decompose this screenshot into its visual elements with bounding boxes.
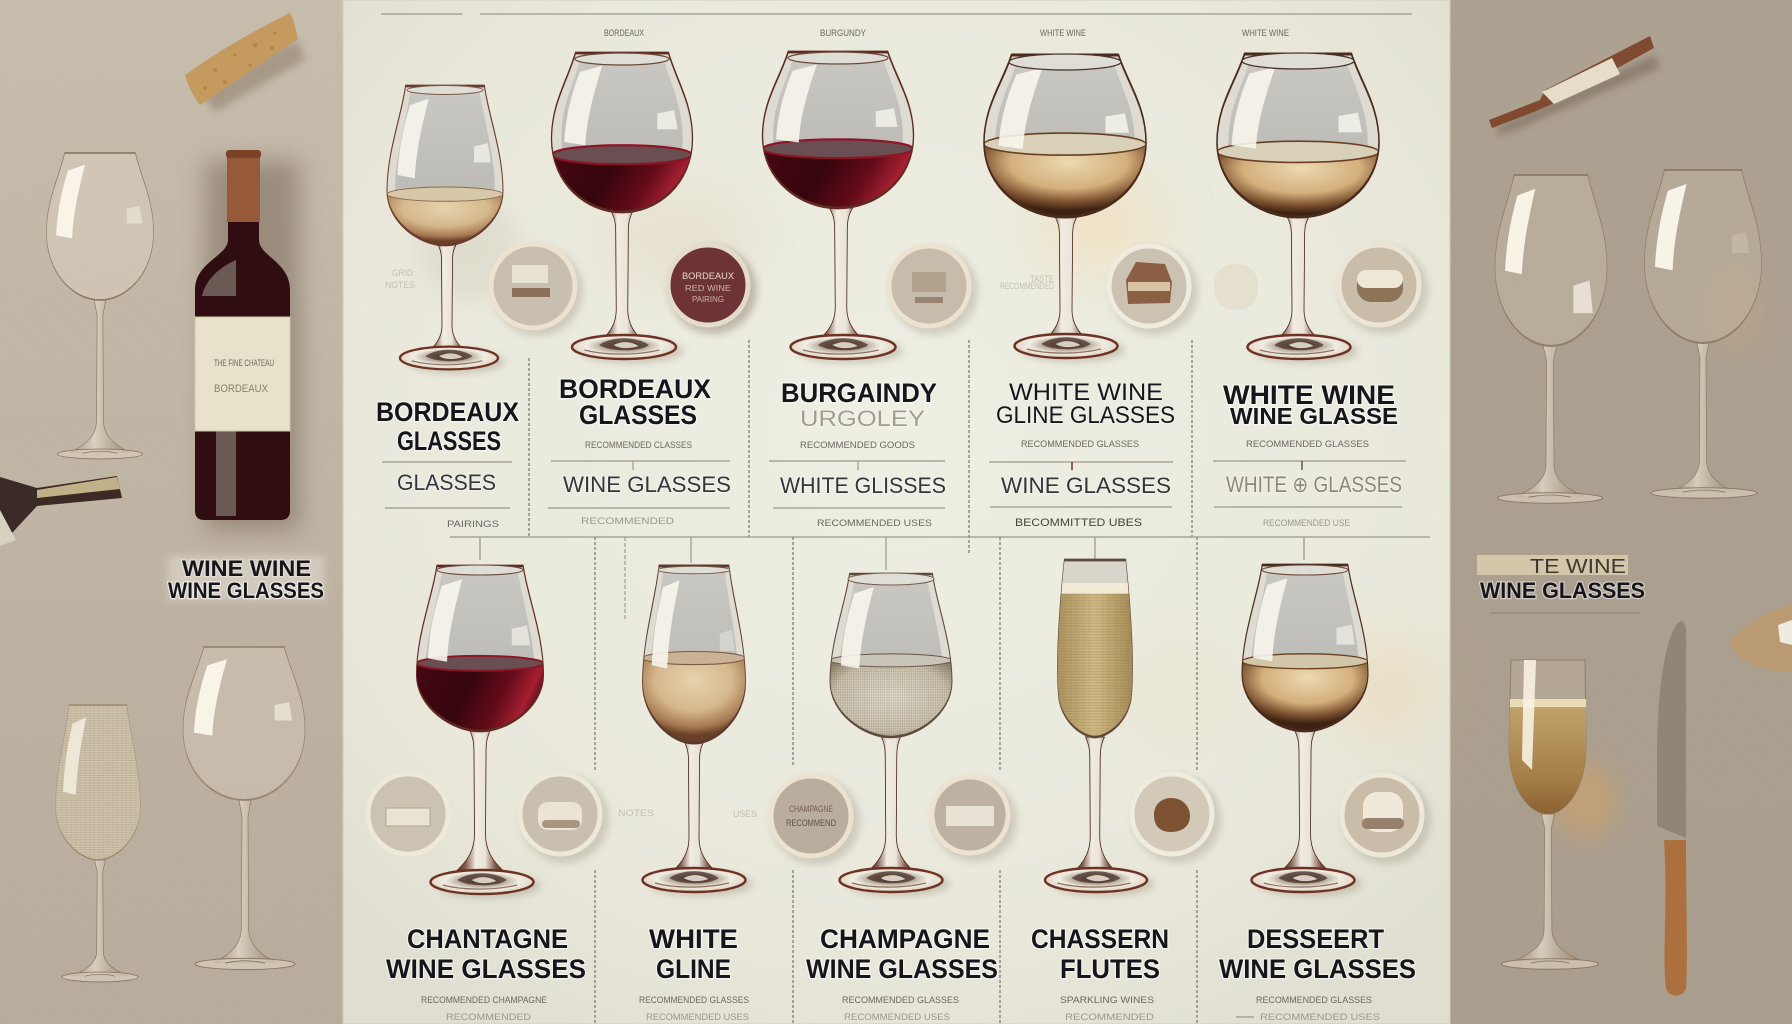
label: chantagne: RECOMMENDED [446,1012,531,1023]
left backdrop [0,0,345,1024]
label: white gline: WHITE [649,924,738,954]
badge: faint side tag: USES [733,809,757,820]
label: white gline [639,924,749,1023]
label: bordeaux 2: BORDEAUX [559,374,711,404]
top captions: WHITE WINE [1040,28,1086,39]
glass 4: white wine balloon [976,54,1154,362]
label: champagne: CHAMPAGNE [820,924,990,954]
glass 8: sparkling tulip [824,573,958,896]
badges: top row: PAIRING [692,295,724,304]
label: dessert [1219,924,1416,1023]
badges: top row: RED WINE [685,284,731,293]
label: dessert: DESSEERT [1247,924,1384,954]
label: white wine 1 [989,379,1175,529]
right backdrop [1448,0,1792,1024]
label: white wine 1: BECOMMITTED UBES [1015,517,1142,529]
label: burgundy: WHITE GLISSES [780,473,946,498]
badges: top row [491,244,1428,336]
badge: faint side tag [385,264,1258,820]
label: chantagne [386,924,586,1023]
label: bordeaux 2: WINE GLASSES [563,472,731,497]
icon: knife [1657,621,1687,996]
label: bordeaux 1 [376,397,519,530]
top captions: WHITE WINE [1242,28,1289,39]
label: burgundy [769,378,946,529]
panel: paper chart [343,0,1450,1024]
glass 1: tulip with white wine [381,86,520,373]
label: chantagne: CHANTAGNE [407,924,568,954]
label: burgundy: BURGAINDY [781,378,937,408]
label: white wine 2: WHITE ⊕ GLASSES [1226,472,1402,497]
label: white gline: RECOMMENDED GLASSES [639,995,749,1006]
glass 10: dessert wine tulip [1236,565,1374,896]
label: champagne: RECOMMENDED USES [844,1012,950,1023]
label: bordeaux 1: BORDEAUX [376,397,519,427]
label: flutes: FLUTES [1060,954,1160,984]
label: flutes: CHASSERN [1031,924,1169,954]
side glass B: sparkling [56,705,140,982]
label: white gline: RECOMMENDED USES [646,1012,749,1023]
label: flutes: SPARKLING WINES [1060,995,1154,1006]
icon: wine bottle: BORDEAUX [214,383,269,395]
label: bordeaux 2: GLASSES [579,400,697,430]
label: white wine 2 [1213,380,1406,529]
label: white wine 1: RECOMMENDED GLASSES [1021,439,1139,450]
icon: cork piece [1729,605,1792,672]
badges: top row: BORDEAUX [682,271,734,281]
label: white wine 2: RECOMMENDED USE [1263,518,1350,529]
badges: bottom row: CHAMPAGNE [789,804,833,814]
label: bordeaux 1: PAIRINGS [447,519,499,530]
icon: lying bottle [0,476,122,546]
badges: bottom row [368,774,1431,865]
label: white gline: GLINE [656,954,731,984]
chart frame lines [381,14,1430,1024]
label: burgundy: URGOLEY [800,406,925,431]
label: white wine 2: WHITE WINE [1223,380,1395,410]
glass 7: white wine tulip [637,566,753,896]
top captions: BURGUNDY [820,28,867,39]
side label: wine wine: WINE GLASSES [168,578,324,603]
label: bordeaux 1: GLASSES [397,470,496,495]
side glass A [47,153,154,459]
label: dessert: RECOMMENDED USES [1260,1012,1380,1023]
label: bordeaux 1: GLASSES [397,426,501,456]
side glass D [1495,175,1607,503]
glass 9: champagne flute [1045,560,1154,896]
badge: faint side tag: RECOMMENDED [1000,281,1054,292]
badges: bottom row: RECOMMEND [786,818,836,828]
label: flutes [1031,924,1169,1023]
side label: white wine [1477,555,1645,613]
icon: wine bottle [195,150,300,530]
label: chantagne: WINE GLASSES [386,954,586,984]
label: flutes: RECOMMENDED [1065,1012,1154,1023]
side label: wine wine: WINE WINE [182,556,311,581]
label: bordeaux 2 [548,374,731,527]
label: white wine 1: GLINE GLASSES [996,402,1175,429]
side glass C [183,647,305,970]
label: dessert: RECOMMENDED GLASSES [1256,995,1372,1006]
side glass F: golden wine [1502,660,1617,969]
badge: faint side tag: TASTE [1030,274,1054,285]
glass 2: bordeaux with red wine [544,53,700,363]
icon: wine bottle: THE FINE CHATEAU [214,358,274,368]
icon: corkscrew [1489,36,1660,136]
glass 5: white wine balloon [1209,53,1387,363]
label: champagne: RECOMMENDED GLASSES [842,995,959,1006]
label: champagne: WINE GLASSES [806,954,998,984]
badge: faint side tag: GRID [392,268,413,279]
side glass E [1644,170,1765,498]
icon: cork [185,13,305,112]
label: white wine 2: RECOMMENDED GLASSES [1246,439,1369,450]
top captions [604,28,1289,39]
badge: faint side tag: NOTES [618,808,654,819]
label: dessert: WINE GLASSES [1219,954,1416,984]
glass 3: burgundy with red wine [755,52,921,363]
label: burgundy: RECOMMENDED GOODS [800,440,915,451]
top captions: BORDEAUX [604,28,644,39]
side label: white wine: WINE GLASSES [1480,578,1645,603]
label: bordeaux 2: RECOMMENDED [581,516,674,527]
badge: faint side tag: NOTES [385,280,415,291]
label: chantagne: RECOMMENDED CHAMPAGNE [421,995,547,1006]
label: bordeaux 2: RECOMMENDED CLASSES [585,440,692,451]
label: burgundy: RECOMMENDED USES [817,518,932,529]
label: champagne [806,924,998,1023]
label: white wine 1: WINE GLASSES [1001,473,1171,498]
label: white wine 1: WHITE WINE [1009,379,1163,406]
label: white wine 2: WINE GLASSE [1230,403,1398,429]
glass 6: red wine tulip [410,565,550,898]
side label: wine wine [168,556,324,603]
side label: white wine: TE WINE [1530,556,1626,578]
